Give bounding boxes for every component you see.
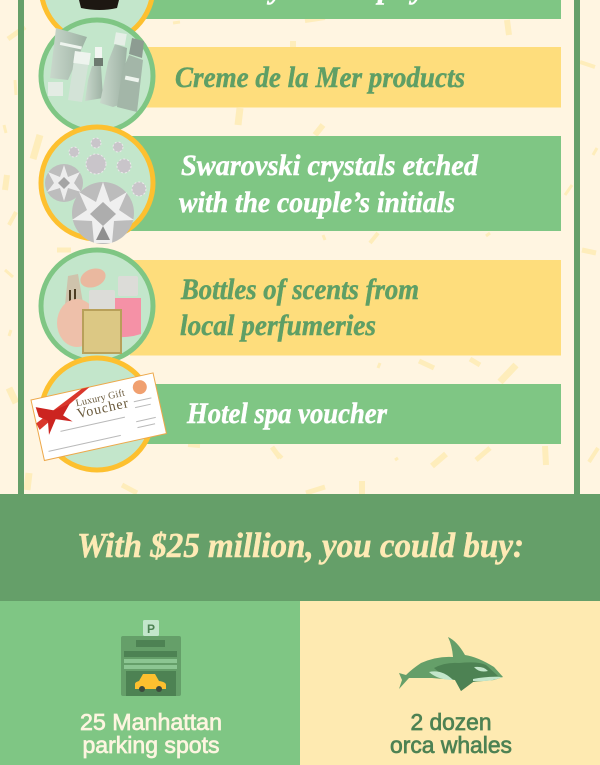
icon: parking garage bbox=[121, 620, 181, 696]
parking label: 25 Manhattan bbox=[80, 709, 222, 735]
icon: dark product bbox=[79, 0, 119, 10]
circle 5 bbox=[41, 358, 153, 470]
bar 1 bbox=[140, 0, 561, 19]
icon: gift voucher: Luxury Gift bbox=[75, 388, 126, 409]
bar 3 text: Swarovski crystals etched bbox=[181, 149, 479, 182]
orca label bbox=[390, 709, 512, 758]
list item 2 bbox=[41, 20, 561, 132]
list item 3 bbox=[41, 127, 561, 244]
bar 4 text: Bottles of scents from bbox=[180, 273, 419, 306]
bar 4 bbox=[130, 260, 561, 356]
bar 3 text: with the couple’s initials bbox=[179, 186, 455, 219]
bar 2 bbox=[140, 47, 561, 108]
bar 2 text: Creme de la Mer products bbox=[175, 61, 465, 94]
circle 4 bbox=[41, 250, 153, 362]
circle 2 bbox=[41, 20, 153, 132]
circle 3 bbox=[41, 127, 153, 239]
icon: gift voucher: Voucher bbox=[76, 396, 130, 422]
list item 5 bbox=[31, 358, 561, 470]
orca label: orca whales bbox=[390, 732, 512, 758]
bar 3 bbox=[130, 136, 561, 231]
list item 4 bbox=[41, 250, 561, 362]
heading band bbox=[0, 494, 600, 601]
parking label: parking spots bbox=[82, 732, 219, 758]
bar 5 bbox=[140, 384, 561, 444]
icon: crystals bbox=[45, 138, 146, 244]
icon: orca bbox=[399, 637, 503, 691]
list item 1 bbox=[41, 0, 561, 43]
panel: parking spots bbox=[0, 601, 300, 765]
icon: parking garage: P bbox=[147, 622, 155, 636]
icon: gift voucher bbox=[31, 373, 166, 461]
bar 4 text: local perfumeries bbox=[180, 309, 376, 342]
parking label bbox=[80, 709, 222, 758]
icon: perfume bottles bbox=[57, 265, 141, 353]
bar 3 text bbox=[179, 149, 479, 219]
orca label: 2 dozen bbox=[410, 709, 492, 735]
bar 4 text bbox=[180, 273, 419, 342]
panel: orca whales bbox=[300, 601, 600, 765]
bar 5 text: Hotel spa voucher bbox=[186, 397, 387, 430]
icon: skincare products bbox=[48, 28, 144, 112]
heading text: With $25 million, you could buy: bbox=[77, 526, 524, 565]
side border lines bbox=[18, 0, 580, 494]
circle 1 bbox=[41, 0, 153, 43]
